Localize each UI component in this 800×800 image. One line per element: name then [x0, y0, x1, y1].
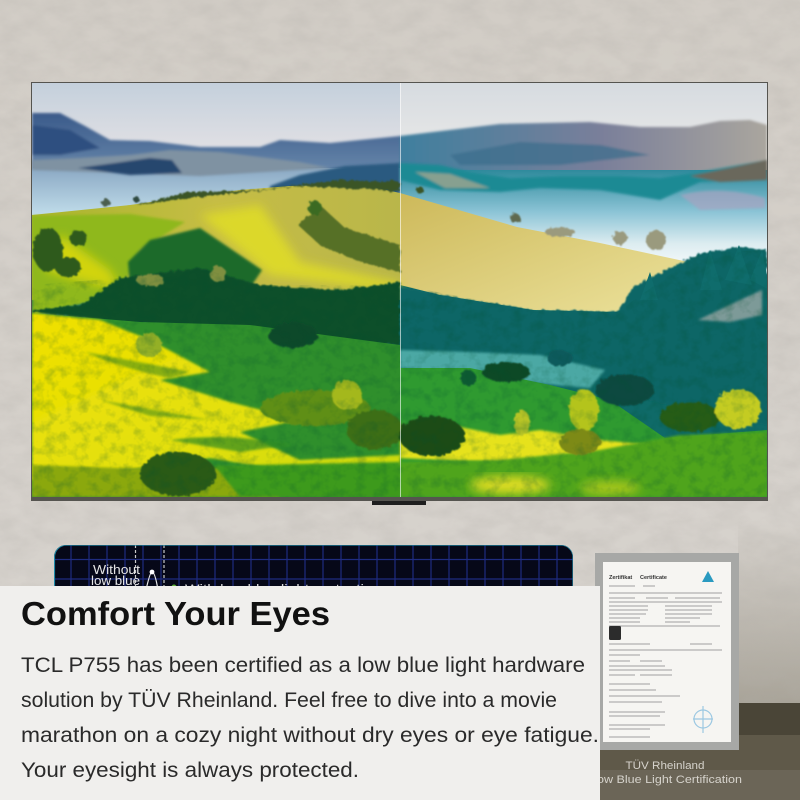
chart label low blue: low blue [91, 573, 140, 588]
dark shrub in clearing [482, 362, 530, 382]
certification stamp [693, 706, 713, 733]
right valley fog [400, 170, 767, 275]
bright patch on golden hill [200, 205, 400, 292]
certificate [595, 553, 739, 750]
legend dot [172, 584, 176, 590]
yellow tree one [569, 389, 599, 431]
certification caption: TÜV Rheinland [626, 760, 704, 772]
dark forest bush [268, 322, 318, 348]
teal clearing [400, 350, 605, 388]
right meadow green [400, 368, 767, 497]
certificate frame [595, 553, 739, 750]
pale slope in forest [698, 290, 762, 322]
hollow shadow [128, 228, 262, 288]
bushes and trees [136, 322, 761, 496]
treeline on golden hill [298, 201, 400, 272]
test mark badge [609, 626, 621, 640]
chart curve [146, 572, 158, 590]
blue light chart panel [54, 545, 573, 597]
screen base [32, 285, 767, 438]
meadow shadow streaks [85, 352, 290, 452]
fog trees [510, 213, 666, 250]
lower green strip [215, 462, 400, 497]
right ridge [400, 160, 767, 210]
certificate paper [603, 562, 731, 742]
left lake fog [32, 168, 400, 220]
right lower meadow [400, 432, 767, 497]
right yellow bush [715, 389, 761, 429]
dark bush at divider [399, 416, 465, 456]
tv stand [372, 501, 426, 505]
body text: TCL P755 has been certified as a low blue light hardware [21, 654, 585, 677]
yellow meadow [32, 313, 400, 480]
certificate body lines [609, 586, 722, 737]
body text: Your eyesight is always protected. [21, 759, 359, 782]
golden hill right [400, 193, 693, 312]
central dark forest [32, 268, 400, 345]
tuv logo [702, 571, 714, 582]
foliage texture [32, 180, 767, 497]
landscape screen image [32, 83, 770, 497]
left green slope [32, 214, 185, 315]
right green bush [660, 402, 720, 432]
title: Comfort Your Eyes [21, 595, 330, 632]
certificate heading right: Certificate [640, 575, 667, 581]
body text: solution by TÜV Rheinland. Feel free to dive into a movie [21, 689, 557, 712]
hill crest dark trees [102, 180, 424, 207]
legend text: With low blue light protection [185, 581, 381, 597]
certification caption: Low Blue Light Certification [590, 774, 742, 786]
forest highlight trees [136, 266, 226, 286]
text panel [0, 586, 600, 800]
distant mountains [32, 111, 767, 170]
yellow ground patch [470, 476, 640, 495]
lower left grass [32, 465, 280, 497]
yellow tree two [514, 410, 530, 436]
left meadow green [32, 313, 400, 497]
split divider line [400, 83, 401, 497]
yellow patch on left slope [45, 235, 120, 290]
certificate heading left: Zertifikat [609, 575, 632, 581]
sky [32, 83, 767, 170]
body text [21, 654, 599, 782]
body text: marathon on a cozy night without dry eyes or eye fatigue. [21, 724, 599, 747]
left bottom bush [140, 452, 216, 496]
teal dark bushes [596, 374, 654, 406]
curve peak dot [150, 570, 154, 574]
right yellow band [400, 425, 650, 462]
television [31, 82, 770, 505]
bush left of divider [347, 410, 403, 450]
large shrub cluster [260, 390, 370, 426]
chart grid [54, 545, 573, 590]
tree tips right [646, 245, 767, 282]
chart label without: Without [93, 562, 140, 577]
teal forest right [398, 246, 767, 344]
left slope trees [33, 228, 87, 277]
yellow shrub [332, 380, 362, 410]
golden hill left [32, 184, 400, 300]
dashed markers [136, 545, 164, 590]
left small bush [136, 333, 162, 357]
panel border [54, 545, 573, 590]
tv frame [31, 82, 768, 501]
certification caption [590, 760, 742, 786]
far shore [32, 150, 400, 195]
